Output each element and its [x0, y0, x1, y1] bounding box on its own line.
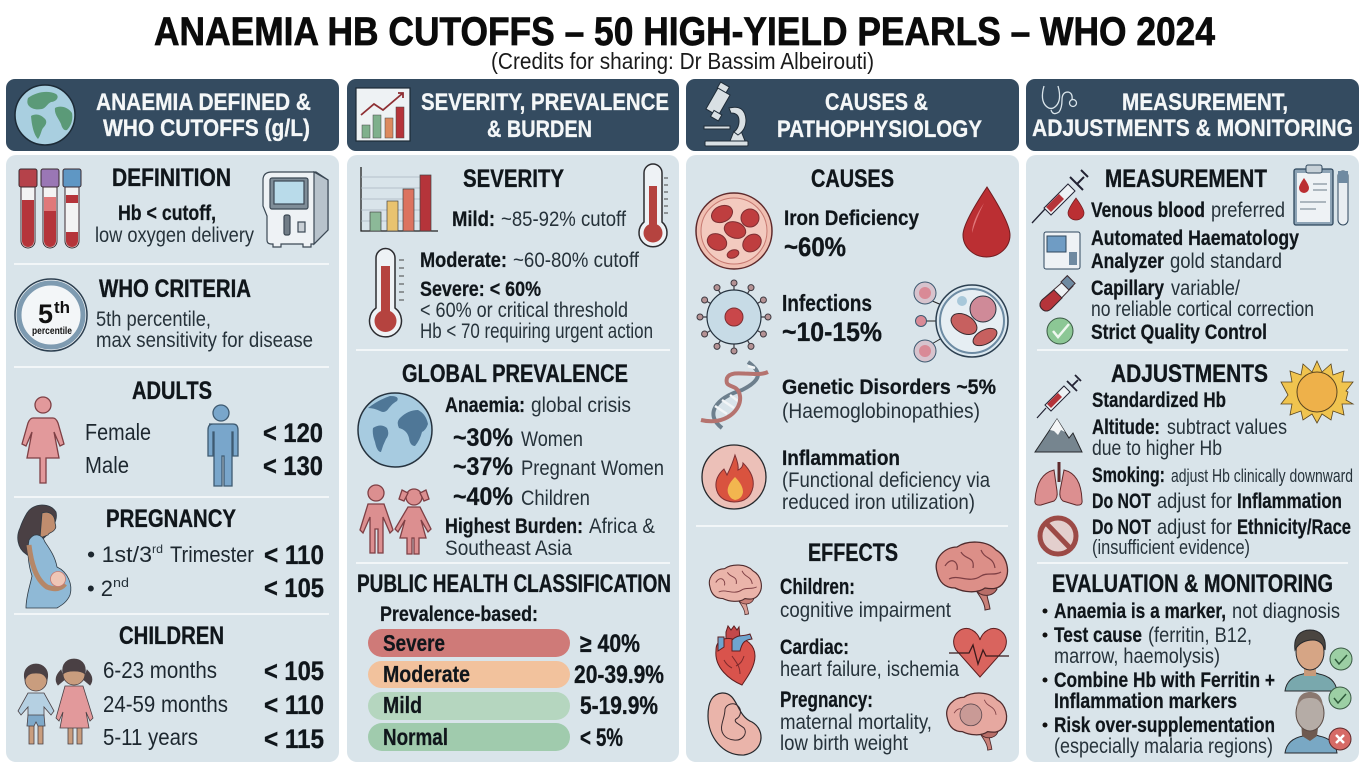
text: cardiac effect: heart failure, ischemia — [780, 658, 959, 681]
icon: red cells — [696, 193, 772, 269]
icon: dna — [701, 362, 768, 428]
subtitle: credits: (Credits for sharing: Dr Bassim Albeirouti) — [491, 48, 874, 74]
icon: patient one — [1285, 630, 1337, 691]
text: test cause: (ferritin, B12, — [1148, 624, 1252, 647]
text: children effect — [780, 574, 951, 622]
text: definition: Hb < cutoff, — [118, 202, 216, 225]
icon: syringe — [1032, 170, 1088, 223]
text: combine — [1042, 669, 1275, 713]
row: moderate — [368, 661, 664, 689]
text: inflammation: reduced iron utilization) — [782, 491, 975, 514]
icon: check two — [1329, 687, 1351, 709]
text: risk: Risk over-supplementation — [1054, 714, 1275, 737]
text: trimester 1/3 — [87, 542, 254, 567]
text: automated analyzer: Automated Haematology — [1091, 227, 1299, 250]
text: trimester 1/3: rd — [152, 542, 163, 556]
text: combine: Inflammation markers — [1054, 690, 1237, 713]
text: capillary — [1091, 277, 1314, 321]
text: test cause: Test cause — [1054, 624, 1142, 647]
icon: small drop — [1068, 198, 1084, 220]
text: cardiac effect — [780, 636, 959, 681]
icon: check — [1047, 318, 1073, 344]
text: do not adjust inflammation: adjust for — [1157, 490, 1232, 513]
text: quality control: Strict Quality Control — [1091, 321, 1267, 344]
heading: measurement: MEASUREMENT — [1105, 165, 1267, 193]
text: children effect: cognitive impairment — [780, 599, 951, 622]
text: who criteria: max sensitivity for disease — [96, 329, 313, 352]
text: capillary: no reliable cortical correction — [1091, 298, 1314, 321]
value: < 105 — [264, 656, 324, 686]
heading: who criteria: WHO CRITERIA — [99, 275, 251, 303]
text: automated analyzer: Analyzer — [1091, 250, 1164, 273]
icon: 5th percentile: 5 — [38, 299, 53, 329]
text: highest burden: Africa & — [589, 515, 655, 538]
text: smoking: Smoking: — [1092, 464, 1165, 487]
column 2 header — [347, 79, 679, 151]
heading: pregnancy: PREGNANCY — [106, 505, 236, 533]
text: risk: (especially malaria regions) — [1054, 735, 1273, 758]
text: do not adjust inflammation: Do NOT — [1092, 490, 1151, 513]
text: do not adjust ethnicity: (insufficient evidence) — [1092, 537, 1250, 559]
text: 6-23 months: 6-23 months — [103, 657, 217, 683]
text: 5-11 years: 5-11 years — [103, 724, 198, 750]
text: standardized hb: Standardized Hb — [1092, 389, 1226, 412]
icon: 5th percentile: percentile — [32, 326, 72, 337]
column 3 header: CAUSES & — [825, 89, 928, 116]
text: test cause: marrow, haemolysis) — [1054, 645, 1220, 668]
row: moderate: 20-39.9% — [574, 661, 664, 689]
value: < 115 — [264, 724, 324, 754]
text: 24-59 months: 24-59 months — [103, 691, 228, 717]
text: do not adjust inflammation: Inflammation — [1237, 490, 1342, 513]
text: severe — [420, 278, 653, 343]
text: infections — [782, 290, 882, 347]
panel: anaemia defined and cutoffs — [6, 155, 339, 762]
text: severe: Severe: < 60% — [420, 278, 541, 301]
text: risk — [1042, 714, 1275, 758]
heading: public health classification: PUBLIC HEALTH CLASSIFICATION — [357, 570, 671, 598]
icon: brain large — [936, 542, 1007, 610]
icon: anatomical heart — [716, 626, 755, 685]
text: trimester 2: nd — [113, 575, 129, 590]
icon: blood tubes — [19, 169, 81, 248]
text: combine: Combine Hb with Ferritin + — [1054, 669, 1275, 692]
icon: 5th percentile: th — [54, 298, 70, 317]
text: pregnancy effect: maternal mortality, — [780, 711, 932, 734]
icon: analyzer — [263, 172, 328, 247]
value: trimester 2 cutoff: < 105 — [264, 573, 324, 603]
icon: virus — [697, 280, 771, 354]
icon: stethoscope — [1042, 86, 1076, 114]
panel: causes and pathophysiology — [686, 155, 1019, 762]
text: capillary: Capillary — [1091, 277, 1164, 300]
text: iron deficiency: Iron Deficiency — [784, 207, 919, 230]
row: normal: < 5% — [580, 724, 623, 752]
text: marker: Anaemia is a marker, — [1054, 600, 1226, 623]
icon: clipboard — [1294, 165, 1348, 225]
icon: globe — [358, 393, 432, 467]
text: highest burden — [445, 515, 655, 560]
icon: children — [360, 485, 431, 554]
text: altitude — [1092, 416, 1287, 460]
text: altitude: subtract values — [1167, 416, 1287, 439]
text: definition: low oxygen delivery — [95, 224, 254, 247]
text: venous: preferred — [1211, 199, 1285, 222]
title: ANAEMIA HB CUTOFFS – 50 HIGH-YIELD PEARLS – WHO 2024 — [154, 10, 1216, 54]
icon: globe — [15, 85, 75, 145]
text: venous: Venous blood — [1091, 199, 1205, 222]
heading: children: CHILDREN — [119, 622, 224, 650]
icon: fetus — [708, 693, 761, 755]
icon: check one — [1330, 648, 1352, 670]
row: normal — [368, 723, 623, 752]
icon: lungs — [1035, 462, 1082, 505]
icon: analyzer — [1044, 232, 1080, 269]
value: female cutoff: < 120 — [263, 418, 323, 448]
icon: syringe — [1037, 375, 1081, 418]
column 4 header: MEASUREMENT, — [1122, 89, 1288, 116]
text: moderate — [420, 249, 639, 272]
text: mild: ~85-92% cutoff — [501, 208, 626, 231]
heading: causes: CAUSES — [811, 165, 894, 193]
text: test cause — [1042, 624, 1252, 668]
column 3 header — [686, 79, 1019, 151]
icon: pregnant woman — [18, 505, 71, 608]
icon: male — [208, 405, 238, 486]
text: trimester 1/3: • 1st/3 — [87, 542, 152, 567]
text: children effect: Children: — [780, 574, 855, 599]
column 1 header: ANAEMIA DEFINED & — [96, 89, 311, 116]
text: do not adjust inflammation — [1092, 490, 1342, 513]
row: moderate: Moderate — [383, 661, 470, 687]
column 1 header: WHO CUTOFFS (g/L) — [103, 115, 310, 142]
text: infections: Infections — [782, 290, 872, 316]
heading: severity: SEVERITY — [463, 165, 564, 193]
text: moderate: ~60-80% cutoff — [513, 249, 639, 272]
text: iron deficiency: ~60% — [784, 232, 846, 262]
icon: patient two — [1285, 692, 1337, 753]
text: pregnant women: ~37% — [453, 453, 513, 481]
panel: measurement adjustments monitoring — [1026, 155, 1359, 762]
text: pregnancy effect — [780, 687, 932, 755]
row: mild: Mild — [383, 692, 422, 718]
heading: adults: ADULTS — [132, 377, 212, 405]
text: altitude: due to higher Hb — [1092, 437, 1222, 460]
text: mild — [452, 208, 626, 231]
icon: capillary tube — [1040, 276, 1075, 311]
text: anaemia global crisis: Anaemia: — [445, 394, 525, 417]
row: normal: Normal — [383, 724, 448, 750]
row: severe — [368, 629, 640, 658]
text: trimester 2: • 2 — [87, 576, 113, 601]
icon: boy and girl — [18, 659, 93, 744]
value: < 110 — [264, 690, 324, 720]
text: trimester 1/3: Trimester — [170, 542, 254, 567]
column 4 header — [1026, 79, 1359, 151]
text: altitude: Altitude: — [1092, 416, 1160, 439]
text: trimester 2 — [87, 575, 129, 601]
text: women — [453, 424, 583, 452]
icon: chart — [356, 88, 410, 141]
text: cardiac effect: Cardiac: — [780, 636, 849, 659]
value: trimester 1/3 cutoff: < 110 — [264, 540, 324, 570]
text: automated analyzer: gold standard — [1170, 250, 1282, 273]
text: do not adjust ethnicity — [1092, 516, 1351, 559]
text: children: ~40% — [453, 483, 513, 511]
text: do not adjust ethnicity: adjust for — [1157, 516, 1232, 539]
text: smoking — [1092, 464, 1353, 487]
icon: mountain — [1035, 419, 1082, 452]
text: anaemia global crisis: global crisis — [531, 394, 631, 417]
heading: effects: EFFECTS — [808, 539, 898, 567]
text: inflammation: (Functional deficiency via — [782, 469, 990, 492]
column 2 header: SEVERITY, PREVALENCE — [421, 89, 669, 116]
text: iron deficiency — [784, 207, 919, 262]
text: severe: < 60% or critical threshold — [420, 299, 628, 322]
icon: female — [22, 397, 64, 483]
row: severe: ≥ 40% — [580, 630, 640, 658]
text: infections: ~10-15% — [782, 317, 882, 347]
text: pregnancy effect: Pregnancy: — [780, 687, 873, 712]
row: severe: Severe — [383, 630, 445, 656]
text: male: Male — [85, 452, 129, 478]
text: capillary: variable/ — [1171, 277, 1240, 300]
text: genetic disorders: Genetic Disorders ~5% — [782, 376, 996, 399]
text: genetic disorders — [782, 376, 996, 423]
value: male cutoff: < 130 — [263, 451, 323, 481]
text: female: Female — [85, 419, 151, 445]
icon: blood drop — [963, 187, 1010, 257]
icon: heartbeat — [949, 628, 1009, 677]
heading: adjustments: ADJUSTMENTS — [1111, 360, 1268, 388]
icon: infected cells — [914, 282, 1008, 362]
text: children — [453, 483, 590, 511]
row: mild: 5-19.9% — [580, 692, 658, 720]
column 1 header — [6, 79, 339, 151]
text: marker: not diagnosis — [1232, 600, 1340, 623]
text: anaemia global crisis — [445, 394, 631, 417]
text: inflammation — [782, 447, 990, 514]
text: severe: Hb < 70 requiring urgent action — [420, 320, 653, 343]
text: mild: Mild: — [452, 208, 495, 231]
text: prevalence based: Prevalence-based: — [380, 603, 538, 626]
heading: global prevalence: GLOBAL PREVALENCE — [402, 360, 628, 388]
text: who criteria: 5th percentile, — [96, 308, 211, 331]
text: pregnant women: Pregnant Women — [521, 457, 664, 480]
row: mild — [368, 692, 658, 720]
heading: definition: DEFINITION — [112, 164, 231, 192]
column 3 header: PATHOPHYSIOLOGY — [777, 116, 982, 143]
text: definition — [95, 202, 254, 247]
text: highest burden: Highest Burden: — [445, 515, 583, 538]
icon: brain small — [709, 565, 761, 615]
icon: sun — [1281, 361, 1353, 423]
text: moderate: Moderate: — [420, 249, 507, 272]
text: genetic disorders: (Haemoglobinopathies) — [782, 400, 980, 423]
icon: cross — [1329, 728, 1351, 750]
panel: severity prevalence burden — [347, 155, 679, 762]
icon: thermometer large — [370, 248, 404, 337]
icon: flame — [702, 445, 766, 509]
text: children: Children — [521, 487, 590, 510]
text: who criteria — [96, 308, 313, 352]
column 2 header: & BURDEN — [487, 116, 592, 143]
icon: bar chart — [361, 167, 438, 231]
text: automated analyzer — [1091, 227, 1299, 273]
text: pregnancy effect: low birth weight — [780, 732, 908, 755]
icon: 5th percentile — [15, 279, 87, 351]
text: do not adjust ethnicity: Do NOT — [1092, 516, 1151, 539]
icon: brain detail — [947, 693, 1007, 750]
icon: thermometer — [639, 164, 668, 247]
text: inflammation: Inflammation — [782, 447, 900, 470]
text: pregnant women — [453, 453, 664, 481]
text: highest burden: Southeast Asia — [445, 537, 572, 560]
text: women: ~30% — [453, 424, 513, 452]
text: women: Women — [521, 428, 583, 451]
icon: prohibited sign — [1040, 518, 1076, 554]
icon: microscope — [704, 82, 748, 146]
